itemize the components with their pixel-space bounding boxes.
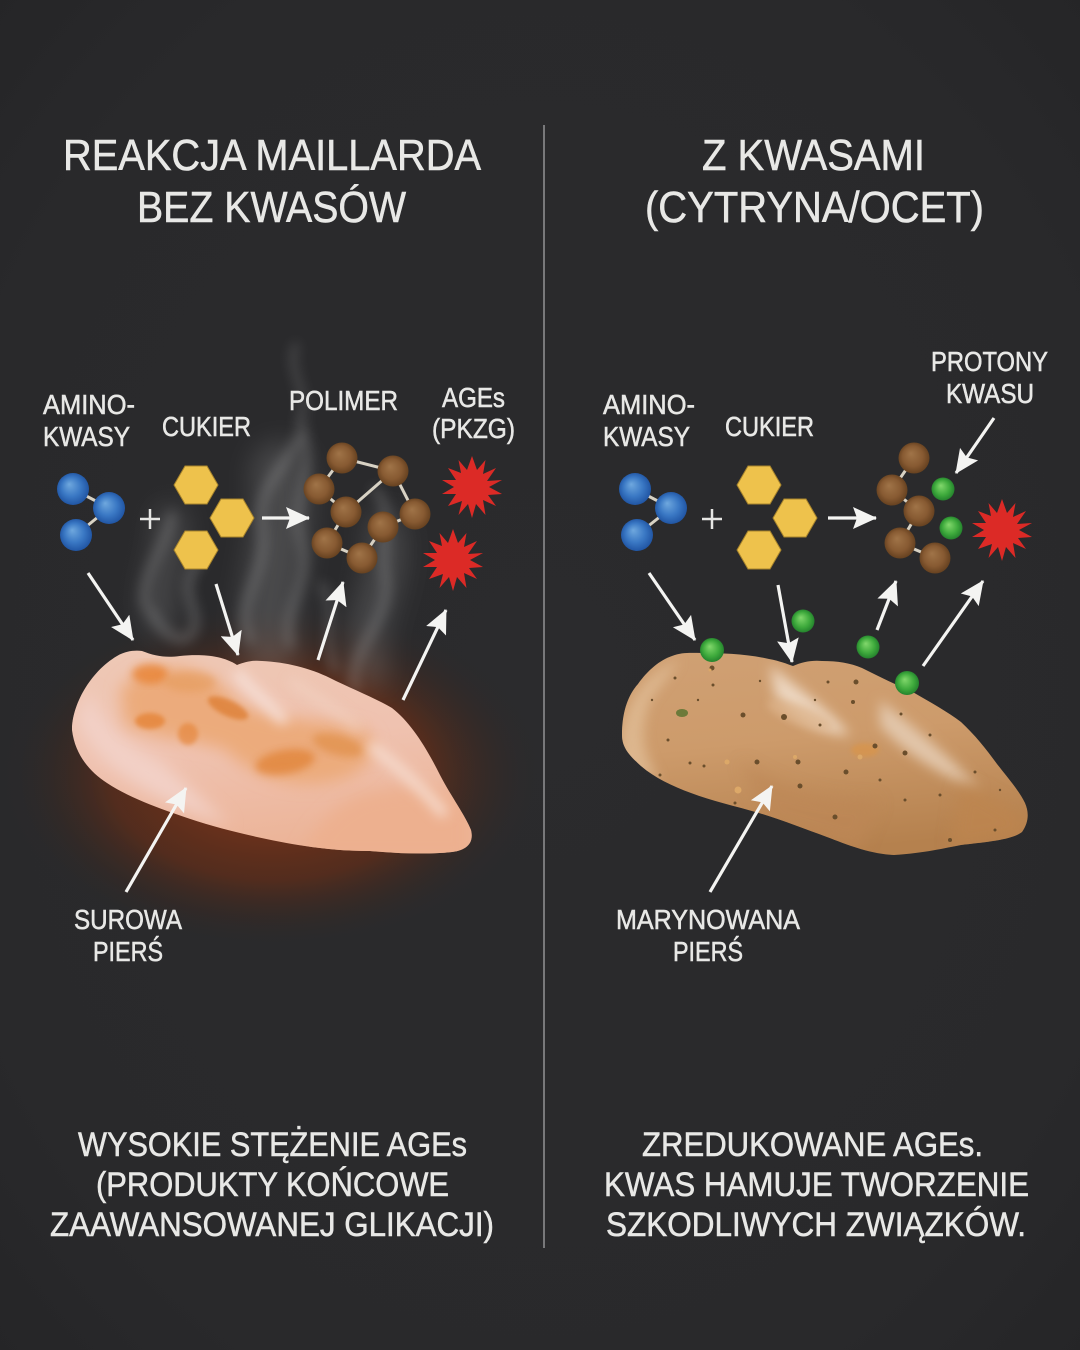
- labels: molecule names: POLIMER: [289, 385, 398, 416]
- plus sign: [140, 509, 160, 529]
- arrow: sugar to polymer: [262, 516, 309, 520]
- icon: AGEs burst: [972, 499, 1032, 561]
- molecule: broken polymer chain: [876, 442, 950, 574]
- molecule: amino acids: [619, 473, 687, 551]
- labels: molecule names: (PKZG): [432, 413, 515, 444]
- labels: molecule names: PROTONY: [931, 346, 1048, 377]
- caption: reduced AGEs: ZREDUKOWANE AGEs.: [642, 1126, 983, 1164]
- heading: Maillard reaction without acids: REAKCJA MAILLARDA: [63, 131, 482, 180]
- labels: molecule names: AGEs: [442, 382, 505, 413]
- caption: high AGEs concentration: ZAAWANSOWANEJ GLIKACJI): [50, 1206, 494, 1244]
- icon: AGEs bursts: [423, 456, 502, 591]
- label: marinated breast: PIERŚ: [673, 935, 743, 967]
- panel: reaction with acids: [603, 131, 1048, 1244]
- caption: high AGEs concentration: [50, 1126, 494, 1244]
- labels: molecule names: AMINO-: [43, 389, 135, 420]
- caption: high AGEs concentration: WYSOKIE STĘŻENIE AGEs: [78, 1126, 467, 1164]
- label: raw breast: PIERŚ: [93, 935, 163, 967]
- icon: acid protons: [700, 478, 962, 695]
- heading: Maillard reaction without acids: [63, 131, 482, 232]
- labels: molecule names: KWASY: [43, 421, 130, 452]
- labels: molecule names: AMINO-: [603, 389, 695, 420]
- labels: molecule names: CUKIER: [162, 411, 251, 442]
- molecule: sugar hexagons: [174, 466, 254, 569]
- caption: high AGEs concentration: (PRODUKTY KOŃCOWE: [96, 1166, 449, 1204]
- marinated chicken breast: [622, 652, 1028, 855]
- labels: molecule names: KWASU: [946, 378, 1034, 409]
- arrow: sugar to polymer: [828, 516, 876, 520]
- heading: Maillard reaction without acids: BEZ KWASÓW: [137, 183, 406, 232]
- labels: molecule names: KWASY: [603, 421, 690, 452]
- plus sign: [702, 509, 722, 529]
- panel: reaction without acids: [42, 139, 514, 1244]
- labels: molecule names: [603, 346, 1048, 452]
- labels: molecule names: [43, 382, 515, 452]
- raw chicken breast: [72, 650, 472, 854]
- steam rising from chicken: [144, 345, 387, 690]
- caption: reduced AGEs: SZKODLIWYCH ZWIĄZKÓW.: [606, 1206, 1026, 1244]
- labels: molecule names: CUKIER: [725, 411, 814, 442]
- heat glow behind raw breast: [2, 600, 542, 950]
- molecule: polymer network: [304, 442, 430, 574]
- caption: reduced AGEs: [604, 1126, 1029, 1244]
- molecule: amino acids: [57, 473, 125, 551]
- caption: reduced AGEs: KWAS HAMUJE TWORZENIE: [604, 1166, 1029, 1204]
- arrows: between chicken and molecules: [88, 573, 446, 892]
- label: raw breast: [74, 904, 182, 967]
- label: marinated breast: [616, 904, 800, 967]
- label: marinated breast: MARYNOWANA: [616, 904, 800, 935]
- heading: with acids: Z KWASAMI: [702, 131, 925, 180]
- heading: with acids: [645, 131, 984, 232]
- label: raw breast: SUROWA: [74, 904, 182, 935]
- heading: with acids: (CYTRYNA/OCET): [645, 183, 984, 232]
- arrows: between chicken and molecules: [649, 418, 994, 892]
- molecule: sugar hexagons: [737, 466, 817, 569]
